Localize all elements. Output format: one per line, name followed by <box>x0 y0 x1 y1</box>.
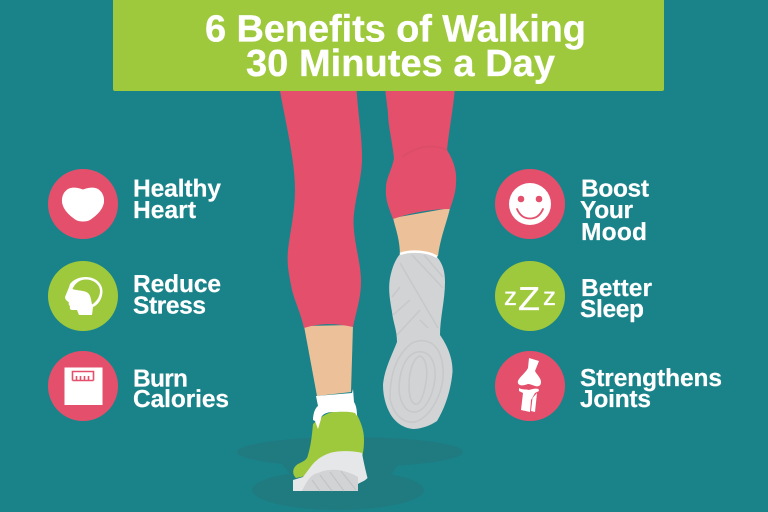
benefit: burn calories <box>48 351 229 421</box>
label: boost your mood <box>580 176 649 246</box>
label: boost your mood: Mood <box>581 219 647 246</box>
label: boost your mood: Your <box>580 197 633 224</box>
label: burn calories: Burn <box>133 366 188 392</box>
label: healthy heart: Heart <box>133 197 196 224</box>
icon: zzz: z <box>543 283 556 311</box>
left leggings <box>280 88 362 328</box>
icon: head <box>48 261 118 331</box>
right leg skin <box>393 208 450 256</box>
title text: 6 Benefits of Walking <box>205 8 586 50</box>
benefit: strengthens joints <box>495 351 722 421</box>
green shoe upper <box>293 411 364 478</box>
shoe sole <box>293 451 368 491</box>
icon: zzz <box>495 261 565 331</box>
label: boost your mood: Boost <box>581 176 649 202</box>
shoe sole shape <box>383 252 453 429</box>
benefit: reduce stress <box>48 261 221 331</box>
label: reduce stress <box>133 271 221 320</box>
icon: smiley <box>495 169 565 239</box>
label: healthy heart <box>133 176 221 224</box>
benefit: boost your mood <box>495 169 649 246</box>
label: better sleep <box>580 275 652 323</box>
label: strengthens joints: Strengthens <box>580 365 722 392</box>
raised shoe sole <box>383 252 453 429</box>
label: reduce stress: Stress <box>133 292 206 320</box>
icon: knee joint <box>495 351 565 421</box>
icon: zzz: Z <box>518 280 540 317</box>
label: better sleep: Sleep <box>580 296 644 323</box>
benefit: healthy heart <box>48 169 221 239</box>
white heel trim <box>400 252 437 257</box>
label: better sleep: Better <box>581 275 652 302</box>
label: strengthens joints <box>580 365 722 413</box>
right leg <box>385 88 456 256</box>
label: burn calories <box>133 366 229 413</box>
knee fold <box>402 146 447 157</box>
left foot and shoe <box>293 389 368 491</box>
ground shadow <box>237 437 463 510</box>
left leg <box>280 88 362 396</box>
icon: scale <box>48 351 118 421</box>
right leggings <box>385 88 456 219</box>
tread pattern <box>390 255 443 422</box>
label: burn calories: Calories <box>133 386 229 413</box>
shoe tread <box>302 470 358 491</box>
icon: heart <box>48 169 118 239</box>
icon: zzz: z <box>504 283 517 311</box>
white sock <box>313 389 357 429</box>
label: healthy heart: Healthy <box>133 176 221 202</box>
label: strengthens joints: Joints <box>580 386 651 413</box>
left leg skin <box>304 325 353 396</box>
title banner: 30 Minutes a Day <box>246 43 555 85</box>
benefit: better sleep <box>495 261 652 331</box>
title banner <box>113 0 664 91</box>
label: reduce stress: Reduce <box>133 271 221 298</box>
